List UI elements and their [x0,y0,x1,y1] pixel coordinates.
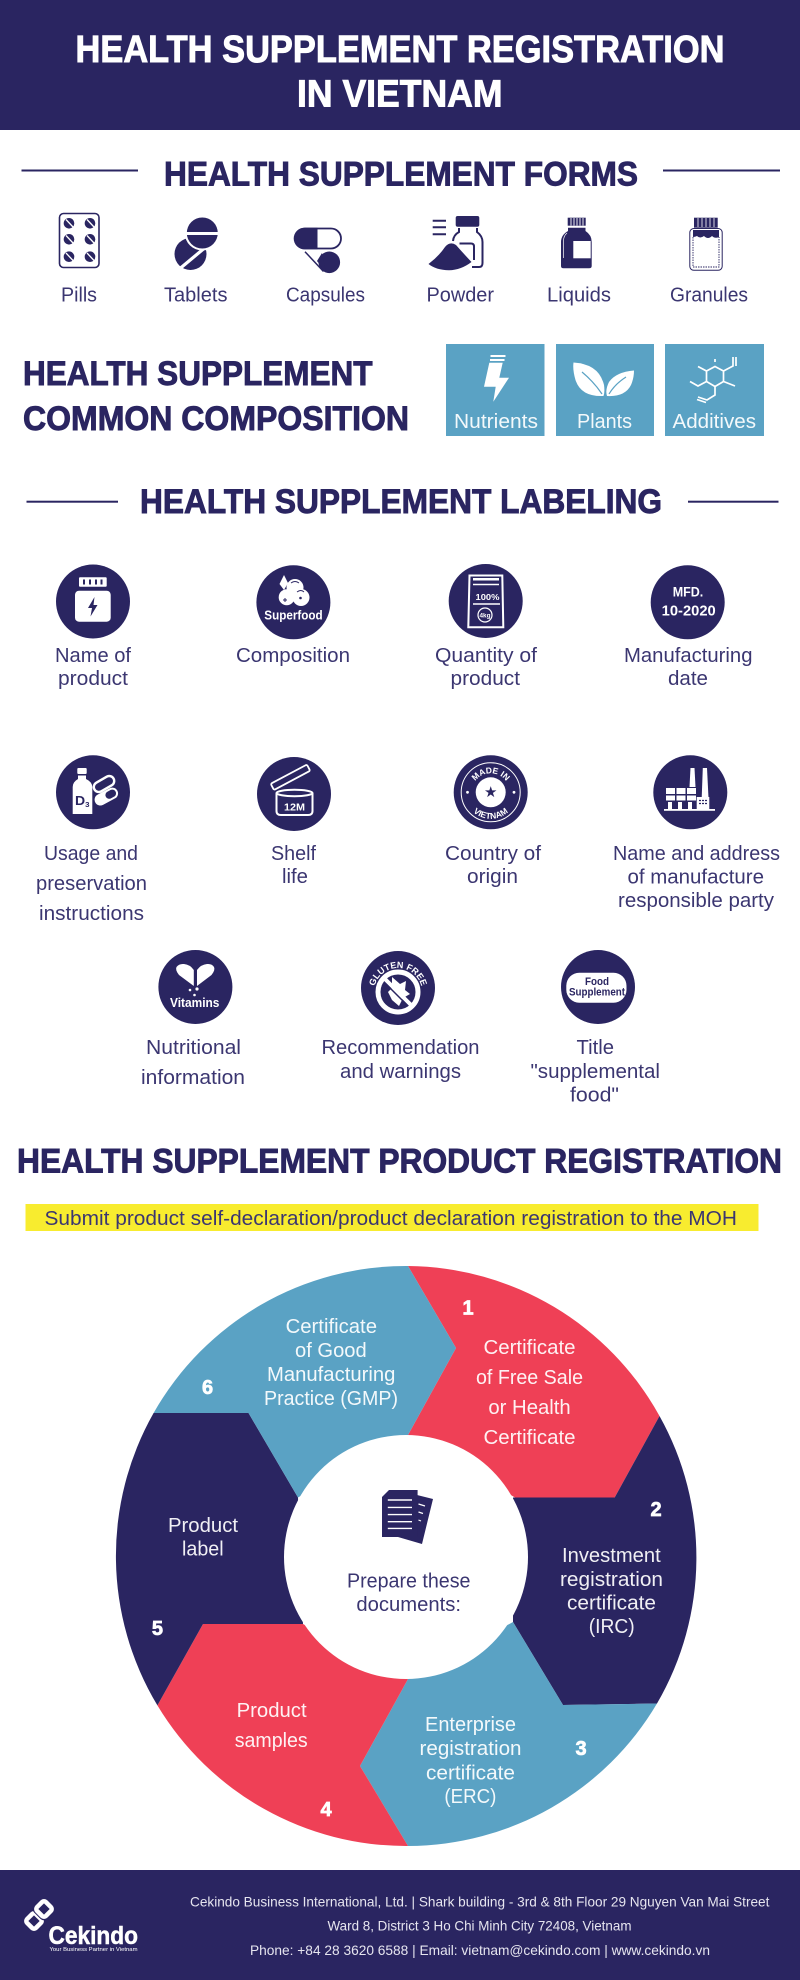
label: Usage and [44,843,138,865]
text [347,1570,470,1616]
label: capsules: Capsules [286,284,365,306]
label: pills: Pills [61,284,97,306]
text: documents: [356,1594,461,1616]
icon: D3 bottle and capsules [56,755,130,829]
heading: forms: HEALTH SUPPLEMENT FORMS [164,156,638,194]
icon: factory [653,755,727,829]
heading: common composition: COMMON COMPOSITION [23,400,409,438]
icon: capsules [294,228,341,273]
icon: leaves [573,362,634,396]
label [271,843,316,888]
item: shelf life [257,757,331,888]
segment 2: investment registration certificate: certificate [567,1592,656,1614]
icon: open jar 12M: 12M [284,802,305,814]
label: food" [570,1084,619,1106]
icon: D3 bottle and capsules: D [75,794,84,808]
icon: D3 bottle and capsules: 3 [85,802,90,809]
label [435,645,537,690]
segment 5: product label: Product [168,1515,238,1537]
segment 1: certificate of free sale: Certificate [484,1427,576,1449]
icon: MFD date: MFD. [673,584,703,600]
panel: supplement forms [60,214,748,306]
label: date [668,668,708,690]
label: tablets: Tablets [164,284,228,306]
item: name of product [55,564,131,690]
title [76,29,724,116]
icon: liquids [561,218,592,268]
segment 4: product samples [157,1624,408,1846]
segment 6: certificate of GMP: Manufacturing [267,1364,395,1386]
segment 5: product label: 5 [152,1618,163,1640]
label [530,1037,660,1106]
segment 1: certificate of free sale: 1 [462,1298,474,1320]
label: additives: Additives [672,411,756,433]
segment 3: enterprise registration certificate: Enterprise [425,1714,516,1736]
logo: cekindo [22,1896,138,1953]
panel: labeling items [36,564,780,1106]
segment 3: enterprise registration certificate: certificate [426,1762,515,1784]
icon: made in vietnam stamp: VIETNAM [474,808,508,819]
segment 6: certificate of GMP: Practice (GMP) [264,1388,398,1410]
segment 5: product label: label [182,1538,224,1560]
segment 2: investment registration certificate: registration [560,1569,663,1591]
icon: MFD date [651,565,725,639]
icon: documents [382,1490,433,1544]
icon: molecule [690,357,736,402]
icon: granules [690,218,722,270]
item: quantity of product [435,564,537,690]
label [445,843,541,888]
icon: pills [60,214,99,268]
item: nutritional information [141,950,245,1089]
segment 1: certificate of free sale: or Health [488,1397,571,1419]
label: powder: Powder [426,284,494,306]
heading: common composition [23,355,409,438]
segment 6: certificate of GMP [154,1266,456,1498]
item: recommendation and warnings [322,951,480,1083]
panel: plants [556,344,654,436]
label: Name and address [613,843,780,865]
icon: made in vietnam stamp: MADE IN [471,768,510,781]
chart: document cycle [116,1266,696,1846]
heading: labeling: HEALTH SUPPLEMENT LABELING [140,483,662,521]
item: usage and preservation [36,755,147,925]
logo: cekindo: Cekindo [48,1922,138,1950]
label: Composition [236,645,350,667]
icon: made in vietnam stamp [454,755,528,830]
item: title supplemental food [530,950,660,1106]
label: preservation [36,873,147,895]
segment 4: product samples: Product [237,1700,307,1722]
segment 1: certificate of free sale: of Free Sale [476,1367,583,1389]
label [624,645,752,690]
icon: jar [56,564,130,638]
segment 5: product label [116,1413,303,1705]
segment 4: product samples: 4 [320,1799,332,1821]
icon: gluten free [361,951,435,1025]
icon: made in vietnam stamp: ★ [484,783,497,801]
icon: bag 4kg [449,564,523,638]
contact details: Cekindo Business International, Ltd. | Shark building - 3rd & 8th Floor 29 Nguyen Van Mai Street [190,1894,770,1910]
segment 2: investment registration certificate: 2 [650,1499,662,1521]
contact details: Ward 8, District 3 Ho Chi Minh City 72408, Vietnam [328,1918,632,1934]
label [613,843,780,912]
label: of manufacture [628,866,764,888]
label: product [58,668,128,690]
label: plants: Plants [577,411,632,433]
icon: food supplement: Food [585,976,609,988]
icon: bag 4kg: 4kg [480,612,491,620]
label: Nutritional [146,1037,241,1059]
contact details [190,1894,770,1958]
icon: powder [428,216,482,270]
label: Title [576,1037,614,1059]
icon: vitamins: Vitamins [170,995,219,1010]
label: information [141,1067,245,1089]
label [322,1037,480,1083]
label: Shelf [271,843,316,865]
contact details: Phone: +84 28 3620 6588 | Email: vietnam@cekindo.com | www.cekindo.vn [250,1942,710,1958]
icon: food supplement [561,950,635,1024]
segment 1: certificate of free sale: Certificate [484,1337,576,1359]
label: nutrients: Nutrients [454,411,538,433]
footer [0,1870,800,1980]
label: "supplemental [530,1061,660,1083]
label: liquids: Liquids [547,284,611,306]
label: granules: Granules [670,284,748,306]
label: and warnings [340,1061,461,1083]
icon: lightning bolt [484,355,509,402]
icon: bag 4kg: 100% [476,593,500,602]
segment 3: enterprise registration certificate [360,1622,657,1846]
label: life [282,866,308,888]
segment 3: enterprise registration certificate: (ERC) [444,1786,496,1808]
icon: gluten free: GLUTEN FREE [370,962,428,986]
segment 2: investment registration certificate [513,1416,696,1705]
panel: additives [665,344,764,436]
segment 1: certificate of free sale [408,1266,660,1498]
segment 6: certificate of GMP: Certificate [286,1316,377,1338]
header banner [0,0,800,130]
heading: common composition: HEALTH SUPPLEMENT [23,355,373,393]
segment 3: enterprise registration certificate: 3 [575,1738,587,1760]
segment 2: investment registration certificate: (IRC) [589,1616,635,1638]
label: origin [467,866,518,888]
callout: submit declaration: Submit product self-declaration/product declaration registration to the MOH [44,1208,737,1230]
title: IN VIETNAM [297,74,502,116]
item: country of origin [445,755,542,888]
item: composition [236,565,350,667]
segment 6: certificate of GMP: 6 [202,1377,213,1399]
panel: nutrients [446,344,544,436]
segment 6: certificate of GMP: of Good [295,1340,367,1362]
label [141,1037,245,1089]
title: HEALTH SUPPLEMENT REGISTRATION [76,29,724,71]
center: prepare these documents [284,1435,528,1679]
icon: tablets [174,216,220,270]
segment 3: enterprise registration certificate: registration [420,1738,522,1760]
icon: MFD date: 10-2020 [662,604,716,620]
icon: superfood: Superfood [264,607,323,622]
segment 4: product samples: samples [235,1730,308,1752]
text: Prepare these [347,1570,470,1592]
icon: food supplement: Supplement [569,986,625,998]
segment 2: investment registration certificate: Investment [562,1545,661,1567]
label: product [450,668,520,690]
label: Quantity of [435,645,537,667]
label: Manufacturing [624,645,752,667]
item: manufacturer [613,755,780,912]
label [36,843,147,925]
label [55,645,131,690]
label: instructions [39,903,144,925]
label: responsible party [618,890,774,912]
label: Country of [445,843,541,865]
label: Recommendation [322,1037,480,1059]
logo: cekindo: Your Business Partner in Vietnam [50,1947,138,1953]
label: Name of [55,645,131,667]
item: manufacturing date [624,565,752,690]
